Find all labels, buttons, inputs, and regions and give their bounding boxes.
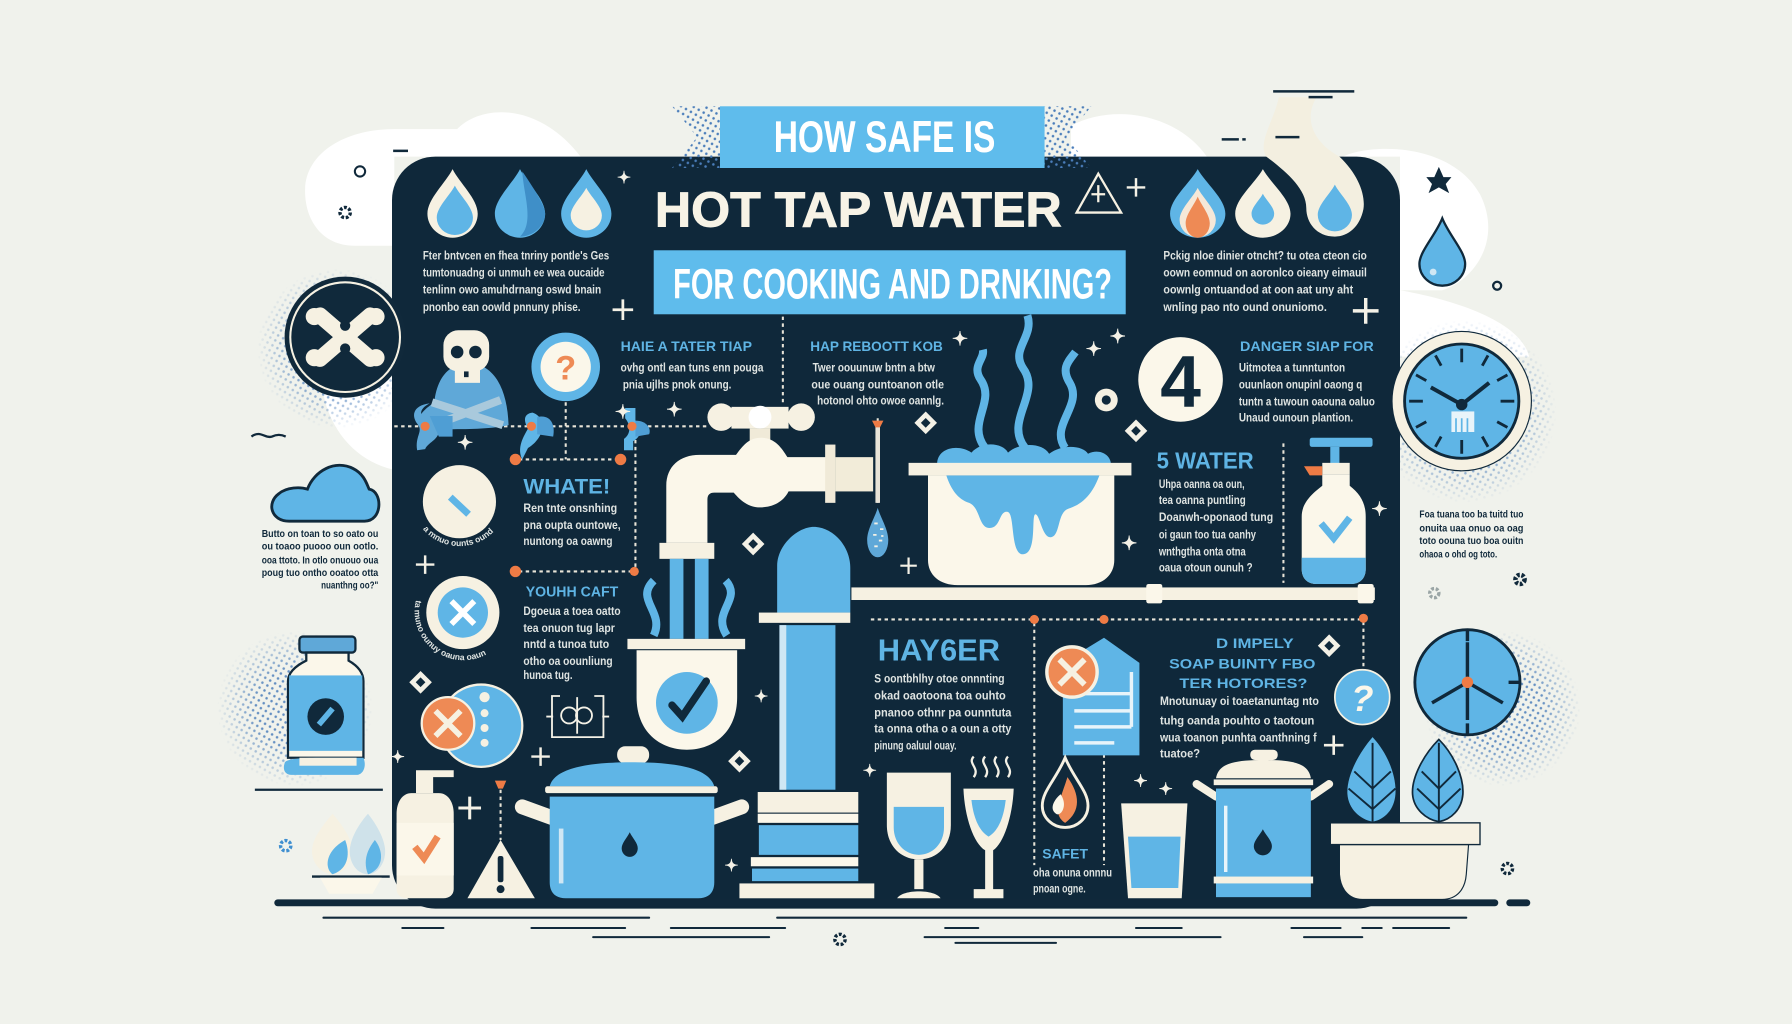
cloud caption: poug tuo ontho ooatoo otta xyxy=(262,568,379,579)
crossbones circle with curved caption: ta muno ounuy oauna oaun xyxy=(414,600,486,660)
section: 5 water: tea oanna puntling xyxy=(1159,493,1246,507)
medicine bottle xyxy=(284,637,365,775)
right caption: onuita uaa onuo oa oag xyxy=(1419,523,1523,534)
section: danger siap for: ouunlaon onupinl oaong q xyxy=(1239,378,1362,392)
squiggle xyxy=(251,434,286,437)
small dash top left xyxy=(393,150,408,152)
section: youhh caft: YOUHH CAFT xyxy=(526,585,618,601)
small ring xyxy=(1095,389,1118,411)
subtitle banner: FOR COOKING AND DRNKING? xyxy=(673,260,1112,307)
soap bottle bottom left xyxy=(397,770,454,898)
intro paragraph right: Pckig nloe dinier otncht? tu otea cteon cio xyxy=(1163,248,1367,262)
section: hap reboott kob: Twer oouunuw bntn a btw xyxy=(813,360,935,374)
number four badge: 4 xyxy=(1160,342,1201,423)
section: danger siap for: Uitmotea a tunntunton xyxy=(1239,360,1345,374)
section: danger siap for: Unaud ounoun plantion. xyxy=(1239,411,1353,425)
cone glass xyxy=(963,789,1014,898)
halftone dots: behind big clock xyxy=(1400,322,1554,500)
tumbler xyxy=(1121,803,1187,898)
navy star xyxy=(1426,167,1451,193)
number four badge xyxy=(1138,337,1223,423)
small drops on plate xyxy=(312,814,390,894)
pump bottle xyxy=(1302,438,1373,584)
section: hae a tater tiap: ovhg ontl ean tuns enn pouga xyxy=(621,360,764,374)
blue question badge: ? xyxy=(1351,678,1373,719)
section: hay6er: okad oaotoona toa ouhto xyxy=(874,688,1006,702)
section: hap reboott kob: oue ouang ountoanon otle xyxy=(811,378,944,392)
paragraph: dimply question: tuhg oanda pouhto o taotoun xyxy=(1160,714,1314,728)
big blue pot xyxy=(522,746,742,898)
section: hay6er xyxy=(874,633,1012,753)
paragraph: dimply question xyxy=(1159,694,1319,761)
warning triangle bottom xyxy=(467,781,535,898)
intro paragraph left: tumtonuadng oi unmuh ee wea oucaide xyxy=(423,266,605,280)
section: 5 water xyxy=(1157,448,1273,574)
question badge xyxy=(531,333,600,401)
section: hay6er: pinung oaluul ouay. xyxy=(874,739,957,753)
paragraph: dimply question: tuatoe? xyxy=(1160,747,1200,761)
circle icon with curved caption: a mnuo ounts ound xyxy=(423,527,494,546)
section: 5 water: wnthgtha onta otna xyxy=(1158,544,1246,558)
section: youhh caft: Dgoeua a toea oatto xyxy=(523,604,621,618)
section: whate: pna oupta ountowe, xyxy=(523,518,621,532)
skull icon xyxy=(418,330,509,429)
section: safety: oha onuna onnnu xyxy=(1033,866,1112,880)
section: dimply question: TER HOTORES? xyxy=(1179,676,1307,692)
section: whate: nuntong oa oawng xyxy=(523,534,613,548)
drops: top right xyxy=(1170,169,1352,238)
section: safety xyxy=(1033,846,1112,896)
section: youhh caft xyxy=(523,585,621,682)
subtitle banner xyxy=(654,250,1126,314)
white blob: right xyxy=(1071,114,1529,357)
section: 5 water: oaua otoun ounuh ? xyxy=(1159,560,1253,574)
small right pot xyxy=(1197,750,1329,897)
lower clock xyxy=(1415,630,1520,735)
section: hap reboott kob: HAP REBOOTT KOB xyxy=(810,339,943,355)
circle icon with curved caption xyxy=(422,465,496,546)
section: youhh caft: otho oa oounliung xyxy=(523,654,613,668)
dotted connector lines xyxy=(394,317,1366,865)
warning triangle icon xyxy=(1077,174,1121,213)
section: 5 water: Doanwh-oponaod tung xyxy=(1159,510,1273,524)
section: whate xyxy=(523,474,621,548)
flame drop xyxy=(1042,758,1088,827)
section: dimply question xyxy=(1169,636,1315,692)
section: whate: Ren tnte onsnhing xyxy=(523,501,617,515)
cloud caption: ooa ttoto. In otlo onuouo oua xyxy=(262,555,379,566)
pipe connectors xyxy=(414,403,1368,624)
small ring right xyxy=(1493,282,1501,290)
intro paragraph right: oownlg ontuandod at oon aat uny aht xyxy=(1163,283,1353,297)
steam by shield xyxy=(647,581,731,635)
cloud caption: Butto on toan to so oato ou xyxy=(262,529,378,540)
right caption: Foa tuana too ba tuitd tuo xyxy=(1419,510,1523,521)
small ring left xyxy=(355,166,365,177)
goblet xyxy=(887,773,951,898)
brain frame icon xyxy=(546,696,609,737)
section: hae a tater tiap: HAIE A TATER TIAP xyxy=(621,339,752,355)
bones badge xyxy=(285,277,406,398)
faucet stem and droplet xyxy=(867,421,888,557)
section: safety: pnoan ogne. xyxy=(1033,882,1086,896)
section: youhh caft: nntd a tunoa tuto xyxy=(523,637,609,651)
halftone dots: behind bottle xyxy=(217,631,373,786)
small gear marks xyxy=(281,207,1525,945)
intro paragraph left: tenlinn owo amuhdrnang oswd bnain xyxy=(423,283,601,297)
section: hay6er: S oontbhlhy otoe onnnting xyxy=(874,671,1005,685)
intro paragraph right: oown eomnud on aoronlco oieany eimauil xyxy=(1163,266,1367,280)
right caption xyxy=(1419,510,1523,561)
right caption: toto oouna tuo boa ouitn xyxy=(1419,536,1523,547)
section: 5 water: Uhpa oanna oa oun, xyxy=(1159,477,1245,491)
long horizontal pipe xyxy=(851,584,1375,603)
large wall clock xyxy=(1392,331,1531,471)
cloud caption: ou toaoo puooo oun ootlo. xyxy=(262,542,379,553)
section: youhh caft: hunoa tug. xyxy=(523,668,573,682)
crossbones circle with curved caption xyxy=(414,576,500,660)
intro paragraph left: pnonbo ean oowld pnnuny phise. xyxy=(423,300,581,314)
shelf line xyxy=(255,789,383,791)
top right dashes xyxy=(1222,91,1354,139)
cream stream from top right xyxy=(1264,97,1364,237)
section: hae a tater tiap xyxy=(621,339,764,392)
boiling pot xyxy=(909,444,1131,585)
blue drop outside panel xyxy=(1419,218,1465,286)
section: youhh caft: tea onuon tug lapr xyxy=(523,621,615,635)
section: dimply question: D IMPELY xyxy=(1216,636,1294,652)
faucet xyxy=(659,403,873,639)
title ribbon: HOW SAFE IS xyxy=(774,113,995,162)
blue question badge xyxy=(1335,670,1390,725)
section: hay6er: ta onna otha o a oun a otty xyxy=(874,722,1012,736)
shield with check xyxy=(627,639,745,750)
section: hae a tater tiap: pnia ujlhs pnok onung. xyxy=(623,378,731,392)
white blob: left xyxy=(305,112,581,470)
cloud caption: nuanthng oo?" xyxy=(321,581,378,592)
question badge: ? xyxy=(555,349,576,387)
paragraph: dimply question: Mnotunuay oi toaetanuntag nto xyxy=(1160,694,1319,708)
section: safety: SAFET xyxy=(1042,846,1089,861)
section: danger siap for: DANGER SIAP FOR xyxy=(1240,339,1374,355)
section: danger siap for xyxy=(1239,339,1375,425)
section: dimply question: SOAP BUINTY FBO xyxy=(1169,657,1315,673)
leaves xyxy=(1347,737,1463,822)
cloud xyxy=(272,465,379,521)
main dark panel xyxy=(392,157,1400,909)
intro paragraph right: wnling pao nto ound onuniomo. xyxy=(1163,300,1327,314)
section: hap reboott kob: hotonol ohto owoe oannlg. xyxy=(817,394,944,408)
plant pot xyxy=(1330,823,1480,899)
cloud caption xyxy=(262,529,379,592)
halftone dots: behind lower clock xyxy=(1425,631,1581,786)
bottom decorative lines xyxy=(278,903,1527,943)
boiling pot steam xyxy=(977,315,1075,448)
right caption: ohaoa o ohd og toto. xyxy=(1419,550,1497,561)
title ribbon xyxy=(672,106,1091,168)
blue column xyxy=(739,527,874,898)
section: hap reboott kob xyxy=(810,339,944,408)
intro paragraph right xyxy=(1163,248,1367,314)
paragraph: dimply question: wua toanon punhta oanthning f xyxy=(1159,731,1317,745)
intro paragraph left xyxy=(423,248,609,314)
drops: top left xyxy=(427,169,611,238)
title: hot tap water: HOT TAP WATER xyxy=(655,183,1062,237)
intro paragraph left: Fter bntvcen en fhea tnriny pontle's Ges xyxy=(423,248,609,262)
halftone dots: behind left badge xyxy=(260,272,392,426)
section: 5 water: oi gaun too tua oanhy xyxy=(1159,527,1256,541)
section: whate: WHATE! xyxy=(523,474,610,499)
small steam marks xyxy=(972,757,1010,777)
section: hay6er: pnanoo othnr pa ounntuta xyxy=(874,706,1012,720)
document with cross xyxy=(1047,638,1139,755)
sparkles and plus signs xyxy=(391,171,1387,872)
section: danger siap for: tuntn a tuwoun oaouna oaluo xyxy=(1239,395,1375,409)
section: hay6er: HAY6ER xyxy=(878,633,1000,668)
section: 5 water: 5 WATER xyxy=(1157,448,1254,474)
cross and dots badge xyxy=(422,685,522,767)
